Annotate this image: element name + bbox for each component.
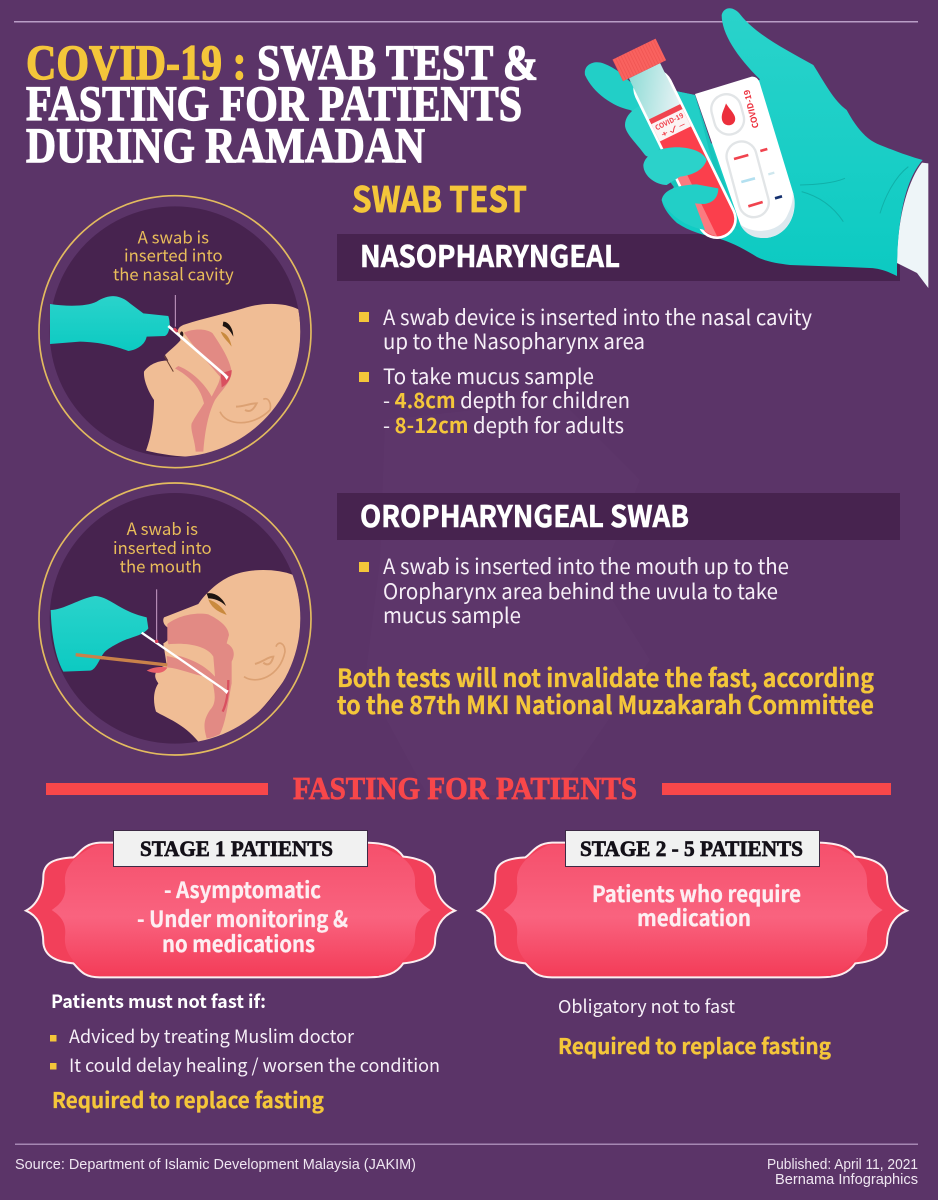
illustration: face profile with nasal passage	[144, 304, 300, 457]
title: COVID-19 : SWAB TEST &	[26, 34, 538, 90]
section heading: fasting for patients	[46, 770, 891, 806]
stage 2-5 description	[592, 877, 801, 933]
text block: oropharyngeal bullet: Oropharynx area behind the uvula to take	[383, 576, 778, 606]
text block: oropharyngeal bullet: mucus sample	[383, 600, 521, 630]
text block: nasopharyngeal bullets: A swab device is inserted into the nasal cavity	[383, 302, 812, 332]
stage 1 description: - Asymptomatic	[164, 873, 321, 905]
text block: nasopharyngeal bullets: - 8-12cm depth for adults	[383, 410, 624, 440]
text block: stage 2-5 obligation: Obligatory not to fast	[558, 993, 735, 1019]
stage 1 description: no medications	[162, 927, 315, 959]
caption: mouth: the mouth	[120, 553, 202, 577]
icon: lab coat cuff	[897, 163, 928, 288]
swab and pointer line	[142, 589, 229, 694]
title: FASTING FOR PATIENTS	[26, 75, 522, 131]
stage 1 description: - Under monitoring &	[137, 902, 348, 934]
footer: publication details	[767, 1156, 918, 1188]
callout: stage 2-5 replace fasting: Required to replace fasting	[558, 1030, 831, 1061]
illustration: mouth swab circle	[39, 483, 311, 755]
icon: ring finger	[643, 147, 707, 185]
panel: stage 1 patients	[26, 830, 455, 977]
stage 2-5 description: medication	[637, 901, 751, 933]
panel: oropharyngeal heading bar	[337, 493, 900, 540]
callout: stage 1 replace fasting: Required to replace fasting	[52, 1084, 324, 1115]
tube label: COVID-19	[654, 111, 686, 133]
tongue depressor grip	[76, 655, 105, 658]
text block: stage 1 conditions: Adviced by treating Muslim doctor	[69, 1023, 355, 1049]
caption: mouth	[113, 516, 212, 577]
icon: gloved hand	[50, 296, 170, 351]
caption: nasal cavity: inserted into	[124, 243, 223, 267]
caption: nasal cavity: A swab is	[138, 224, 209, 248]
icon: little finger	[662, 184, 718, 230]
icon: glove folds	[800, 167, 908, 222]
text block: stage 1 conditions: It could delay healing / worsen the condition	[69, 1052, 440, 1078]
text block: stage 1 conditions: Patients must not fast if:	[51, 988, 266, 1014]
icon: test tube	[612, 39, 747, 248]
title	[26, 34, 538, 173]
icon: glove palm and thumb	[662, 8, 923, 276]
background watermark	[365, 400, 650, 800]
stage 1 label: STAGE 1 PATIENTS	[140, 836, 333, 861]
icon: tongue depressor	[76, 655, 167, 665]
caption: nasal cavity: the nasal cavity	[113, 262, 234, 286]
icon: middle finger	[625, 104, 667, 157]
stage 2-5 label	[566, 830, 820, 866]
stage 1 label	[114, 830, 368, 866]
panel: stage 2-5 patients	[478, 830, 907, 977]
footer: source: Source: Department of Islamic Development Malaysia (JAKIM)	[15, 1156, 416, 1173]
callout: both tests statement	[337, 659, 874, 722]
text block: nasopharyngeal bullets: up to the Nasopharynx area	[383, 326, 645, 356]
kit label: COVID-19	[740, 88, 762, 130]
text block: oropharyngeal bullet: A swab is inserted into the mouth up to the	[383, 551, 789, 581]
heading: swab test: SWAB TEST	[352, 172, 527, 223]
stage 2-5 description: Patients who require	[592, 877, 801, 909]
stage 2-5 label: STAGE 2 - 5 PATIENTS	[580, 836, 803, 861]
caption: nasal cavity	[113, 224, 234, 286]
illustration: nasal swab circle	[39, 196, 311, 468]
icon: hand backing behind tube	[630, 82, 740, 230]
text block: stage 1 conditions	[50, 988, 440, 1078]
title: DURING RAMADAN	[26, 117, 425, 173]
text block: nasopharyngeal bullets	[359, 302, 812, 440]
footer: publication details: Bernama Infographics	[775, 1171, 918, 1188]
caption: mouth: A swab is	[127, 516, 198, 540]
heading: nasopharyngeal: NASOPHARYNGEAL	[360, 232, 620, 276]
footer: publication details: Published: April 11, 2021	[767, 1156, 918, 1173]
swab and pointer line	[168, 295, 229, 380]
icon: test tube: + ✓ −	[660, 120, 687, 140]
illustration: gloved hand holding test tube and test kit	[585, 8, 928, 288]
text block: oropharyngeal bullet	[359, 551, 789, 630]
heading: oropharyngeal swab: OROPHARYNGEAL SWAB	[360, 492, 689, 536]
test window	[723, 138, 772, 221]
stage 1 description	[137, 873, 348, 959]
icon: gloved hand	[51, 596, 148, 672]
callout: both tests statement: to the 87th MKI National Muzakarah Committee	[337, 686, 874, 722]
text block: nasopharyngeal bullets: To take mucus sample	[383, 361, 594, 391]
icon: index finger	[585, 62, 713, 167]
illustration: face profile with oral passage	[147, 570, 301, 742]
sample well with blood drop	[708, 91, 747, 138]
text block: nasopharyngeal bullets: - 4.8cm depth for children	[383, 385, 630, 415]
callout: both tests statement: Both tests will not invalidate the fast, according	[337, 659, 874, 695]
icon: test kit cassette	[695, 77, 795, 238]
caption: mouth: inserted into	[113, 535, 212, 559]
panel: nasopharyngeal heading bar	[337, 234, 900, 281]
section heading: fasting for patients: FASTING FOR PATIENTS	[293, 770, 637, 806]
